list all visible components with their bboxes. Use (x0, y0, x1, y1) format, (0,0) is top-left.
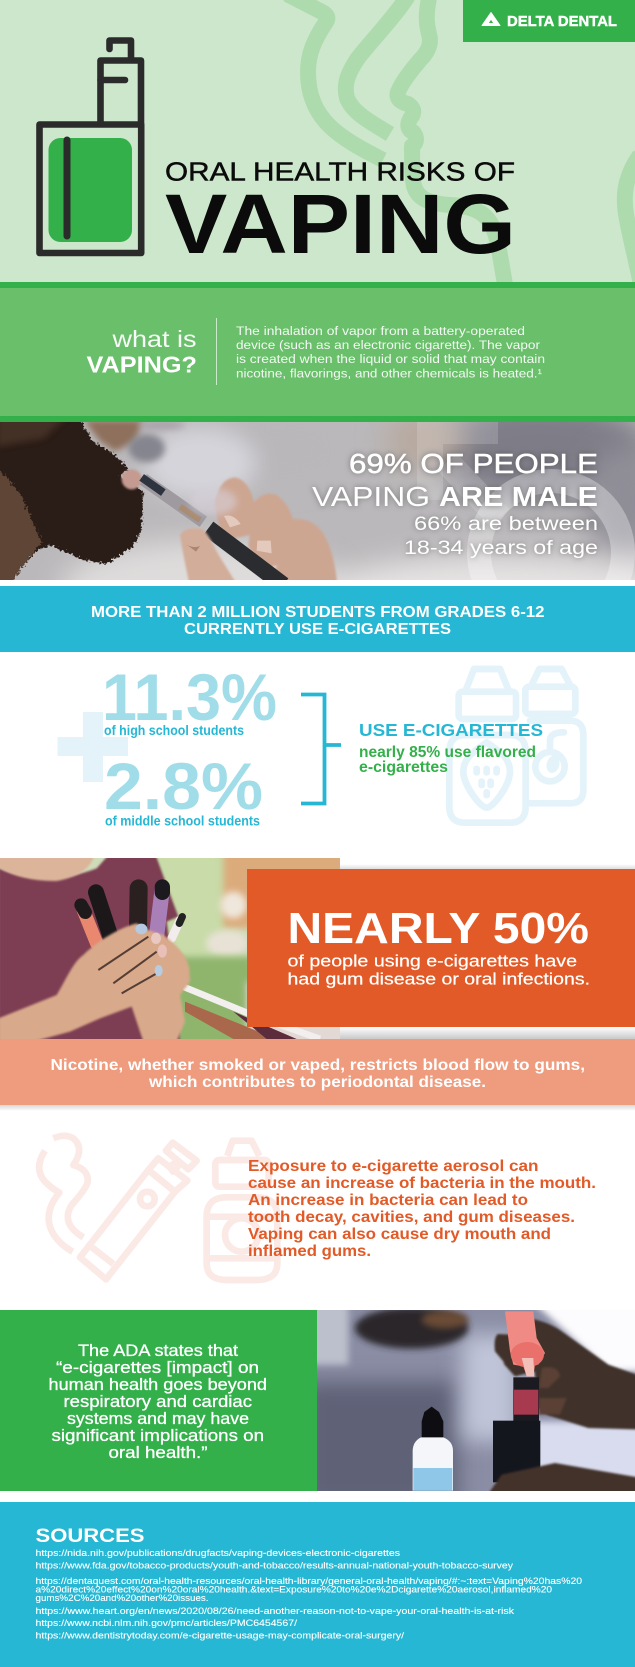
rail (183, 987, 320, 1039)
shadow strip above orange box (340, 864, 635, 869)
panel: ADA quote: human health goes beyond (48, 1375, 267, 1394)
bacteria paragraph: Exposure to e-cigarette aerosol can (248, 1158, 538, 1175)
source links: https://nida.nih.gov/publications/drugfacts/vaping-devices-electronic-cigarettes (36, 1548, 400, 1559)
panel: hands holding e-cigarettes photo (0, 858, 340, 1039)
arm and hand (0, 923, 190, 1042)
stat text: 69% OF PEOPLE (349, 448, 598, 479)
e-cigarette use callout: USE E-CIGARETTES (359, 720, 543, 740)
panel: students banner: CURRENTLY USE E-CIGARETTES (184, 621, 451, 638)
panel: nearly 50% callout (247, 869, 635, 1027)
stat text: 18-34 years of age (404, 538, 598, 559)
shirt (0, 853, 180, 1042)
title: VAPING (165, 177, 516, 271)
panel: nicotine banner (0, 1039, 635, 1105)
definition text: device (such as an electronic cigarette). The vapor (236, 338, 540, 352)
photo background (147, 848, 347, 1050)
statistic: middle school: 2.8% (104, 749, 263, 823)
mod box and tank (513, 1377, 539, 1421)
bracket (301, 694, 341, 804)
panel: ADA quote: The ADA states that (78, 1341, 238, 1360)
e-cigarette use callout: nearly 85% use flavored (359, 744, 536, 761)
statistic: middle school: of middle school students (105, 814, 260, 828)
panel: nearly 50% callout: of people using e-cigarettes have (288, 952, 577, 970)
stat text (312, 448, 598, 559)
vape pen (142, 477, 283, 585)
panel: nicotine banner: which contributes to periodontal disease. (148, 1074, 486, 1091)
bacteria paragraph (248, 1158, 596, 1260)
icon: delta triangle (482, 12, 500, 26)
definition text (236, 324, 545, 380)
bacteria paragraph: An increase in bacteria can lead to (248, 1192, 528, 1209)
panel: ADA quote: significant implications on (52, 1426, 264, 1445)
sources heading: SOURCES (36, 1525, 144, 1547)
statistic: high school: 11.3% (102, 660, 277, 734)
panel: ADA quote: “e-cigarettes [impact] on (56, 1358, 259, 1377)
icon: flavored liquid bottles (449, 669, 583, 823)
source links: https://www.dentistrytoday.com/e-cigarette-usage-may-complicate-oral-surgery/ (36, 1631, 404, 1642)
panel: nicotine banner: Nicotine, whether smoked or vaped, restricts blood flow to gums, (50, 1057, 585, 1074)
source links: https://www.heart.org/en/news/2020/08/26/need-another-reason-not-to-vape-your-oral-health-is-at-risk (36, 1606, 514, 1617)
stat text: ARE MALE (439, 481, 598, 512)
panel: ADA quote: respiratory and cardiac (64, 1392, 253, 1411)
lower hand (488, 1463, 635, 1495)
bacteria paragraph: Vaping can also cause dry mouth and (248, 1226, 551, 1243)
photo background (317, 1310, 635, 1491)
bacteria paragraph: inflamed gums. (248, 1243, 371, 1260)
source links: https://www.ncbi.nlm.nih.gov/pmc/articles/PMC6454567/ (36, 1618, 297, 1629)
small bottle (422, 1407, 443, 1441)
panel: male vaping photo (0, 422, 635, 580)
pens (81, 887, 182, 943)
source links: https://www.fda.gov/tobacco-products/youth-and-tobacco/results-annual-national-youth-tobacco-survey (36, 1561, 513, 1572)
stat text: 66% are between (414, 514, 598, 535)
icon: plus sign (58, 712, 128, 782)
male symbol (417, 422, 635, 580)
neck (0, 858, 94, 882)
panel: students banner: MORE THAN 2 MILLION STUDENTS FROM GRADES 6-12 (91, 604, 545, 621)
header panel (0, 0, 635, 290)
panel: ADA quote: systems and may have (67, 1409, 249, 1428)
stat text: VAPING (312, 481, 430, 512)
statistic: high school: of high school students (104, 723, 244, 738)
bacteria paragraph: tooth decay, cavities, and gum diseases. (248, 1209, 575, 1226)
heading (86, 326, 197, 378)
logo badge (463, 0, 635, 42)
source links: gums%2C%20and%20other%20issues. (36, 1593, 208, 1604)
definition text: is created when the liquid or solid that may contain (236, 352, 545, 366)
heading: VAPING? (86, 352, 197, 378)
hand thumb (179, 528, 236, 580)
panel: ADA quote: oral health.” (108, 1443, 208, 1462)
shadow strip beneath orange box (340, 1027, 635, 1039)
hand (495, 1317, 635, 1430)
panel: ADA quote (0, 1310, 317, 1491)
panel: e-liquid refill photo (317, 1310, 635, 1491)
icon: vape device (40, 40, 141, 253)
dropper (505, 1311, 545, 1376)
definition text: The inhalation of vapor from a battery-operated (236, 324, 525, 338)
panel: nearly 50% callout: NEARLY 50% (288, 904, 589, 953)
source links: https://dentaquest.com/oral-health-resources/oral-health-library/general-oral-health/vaping/#:~:text=Vaping%20has%20 (36, 1576, 582, 1587)
panel: nearly 50% callout: had gum disease or oral infections. (288, 970, 590, 988)
e-cigarette use callout (359, 720, 543, 776)
logo wordmark: DELTA DENTAL (507, 14, 617, 30)
panel: what is vaping (0, 282, 635, 422)
e-cigarette use callout: e-cigarettes (359, 759, 448, 776)
photo subject (0, 422, 338, 580)
heading: what is (111, 326, 196, 352)
source links (36, 1548, 582, 1642)
hand fingers (215, 477, 337, 587)
bacteria paragraph: cause an increase of bacteria in the mouth. (248, 1175, 596, 1192)
source links: a%20direct%20effect%20on%20oral%20health.&text=Exposure%20to%20e%2Dcigarette%20aerosol,inflamed%20 (36, 1584, 552, 1595)
title: ORAL HEALTH RISKS OF (165, 156, 515, 186)
icon: vape pen, smoke and bottle (39, 1136, 277, 1280)
photo background tones (56, 422, 635, 580)
panel: students banner (0, 586, 635, 652)
definition text: nicotine, flavorings, and other chemicals is heated.¹ (236, 366, 542, 380)
background face silhouette (287, 0, 635, 290)
panel: sources (0, 1502, 635, 1667)
